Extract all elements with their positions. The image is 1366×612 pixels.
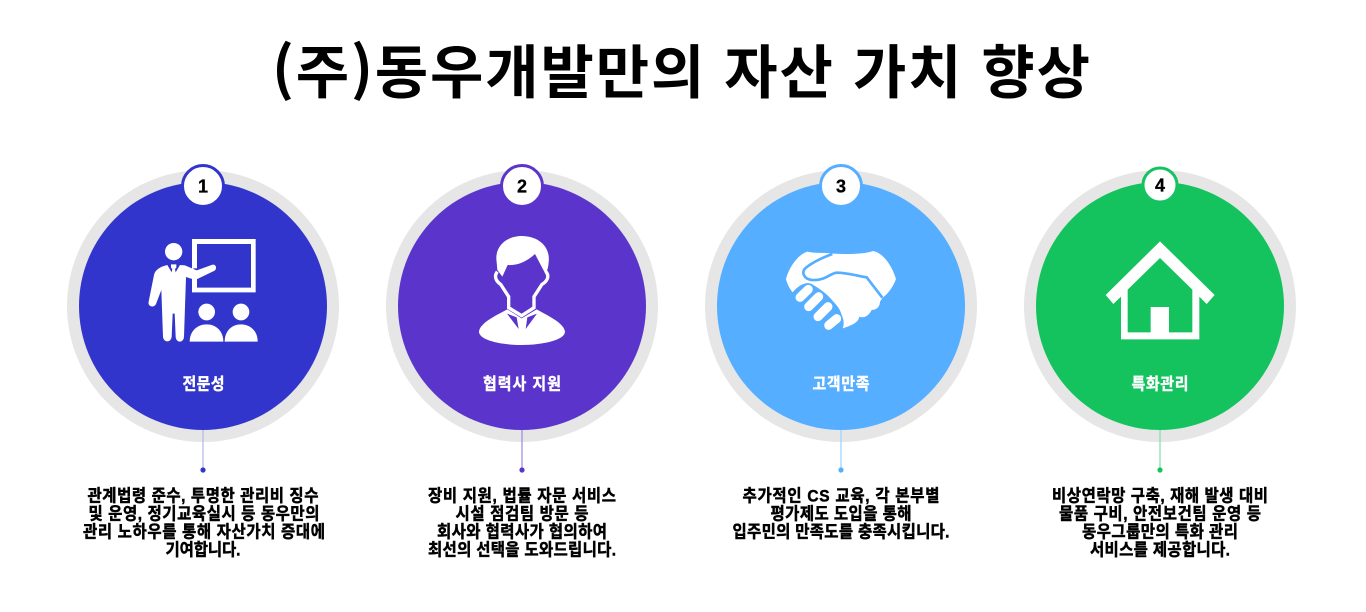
connector dot 4	[1157, 467, 1163, 473]
panel: 협력사 지원	[386, 166, 658, 560]
description 2: 최선의 선택을 도와드립니다.	[428, 541, 616, 560]
circle fill 4	[1036, 182, 1284, 430]
description 3: 추가적인 CS 교육, 각 본부별	[742, 487, 940, 506]
connector line 2	[521, 430, 523, 470]
circle ring 1	[67, 170, 339, 442]
description 4: 서비스를 제공합니다.	[1090, 541, 1230, 560]
connector line 1	[202, 430, 204, 470]
icon: handshake	[786, 251, 896, 328]
description 4: 비상연락망 구축, 재해 발생 대비	[1052, 487, 1268, 506]
circle ring 3	[705, 170, 977, 442]
title: (주)동우개발만의 자산 가치 향상	[272, 26, 1090, 110]
number badge 4	[1143, 168, 1177, 202]
number badge 4: 4	[1155, 176, 1165, 196]
connector dot 1	[200, 467, 206, 473]
label 고객만족: 고객만족	[812, 375, 869, 394]
circle ring 2	[386, 170, 658, 442]
description 1: 관계법령 준수, 투명한 관리비 징수	[87, 487, 319, 506]
circle fill 3	[717, 182, 965, 430]
panel: 고객만족	[705, 166, 977, 542]
circle fill 2	[398, 182, 646, 430]
description 4: 물품 구비, 안전보건팀 운영 등	[1059, 505, 1261, 524]
description 1: 관리 노하우를 통해 자산가치 증대에	[83, 523, 325, 542]
description 3: 입주민의 만족도를 충족시킵니다.	[732, 523, 950, 542]
description 1	[83, 487, 325, 560]
connector dot 3	[838, 467, 844, 473]
description 2	[428, 487, 616, 560]
icon: house	[1106, 241, 1215, 339]
number badge 1	[182, 166, 224, 206]
label 협력사 지원: 협력사 지원	[483, 375, 561, 394]
panel: 전문성	[67, 166, 339, 560]
description 1: 및 운영, 정기교육실시 등 동우만의	[88, 505, 320, 524]
description 2: 장비 지원, 법률 자문 서비스	[428, 487, 616, 506]
connector line 4	[1159, 430, 1161, 470]
number badge 3	[820, 166, 862, 206]
label 특화관리: 특화관리	[1131, 375, 1188, 394]
description 2: 시설 점검팀 방문 등	[456, 505, 589, 524]
description 4: 동우그룹만의 특화 관리	[1082, 523, 1238, 542]
circle ring 4	[1024, 170, 1296, 442]
icon: presenter at board	[148, 239, 258, 342]
description 3	[732, 487, 950, 542]
connector dot 2	[519, 467, 525, 473]
description 4	[1052, 487, 1268, 560]
connector line 3	[840, 430, 842, 470]
number badge 3: 3	[836, 176, 846, 196]
description 2: 회사와 협력사가 협의하여	[437, 523, 607, 542]
description 3: 평가제도 도입을 통해	[771, 505, 912, 524]
number badge 1: 1	[198, 176, 208, 196]
number badge 2: 2	[517, 176, 527, 196]
label 전문성: 전문성	[182, 375, 224, 394]
number badge 2	[502, 166, 542, 206]
circle fill 1	[79, 182, 327, 430]
icon: businessman	[479, 236, 565, 345]
panel: 특화관리	[1024, 168, 1296, 560]
description 1: 기여합니다.	[165, 541, 240, 560]
